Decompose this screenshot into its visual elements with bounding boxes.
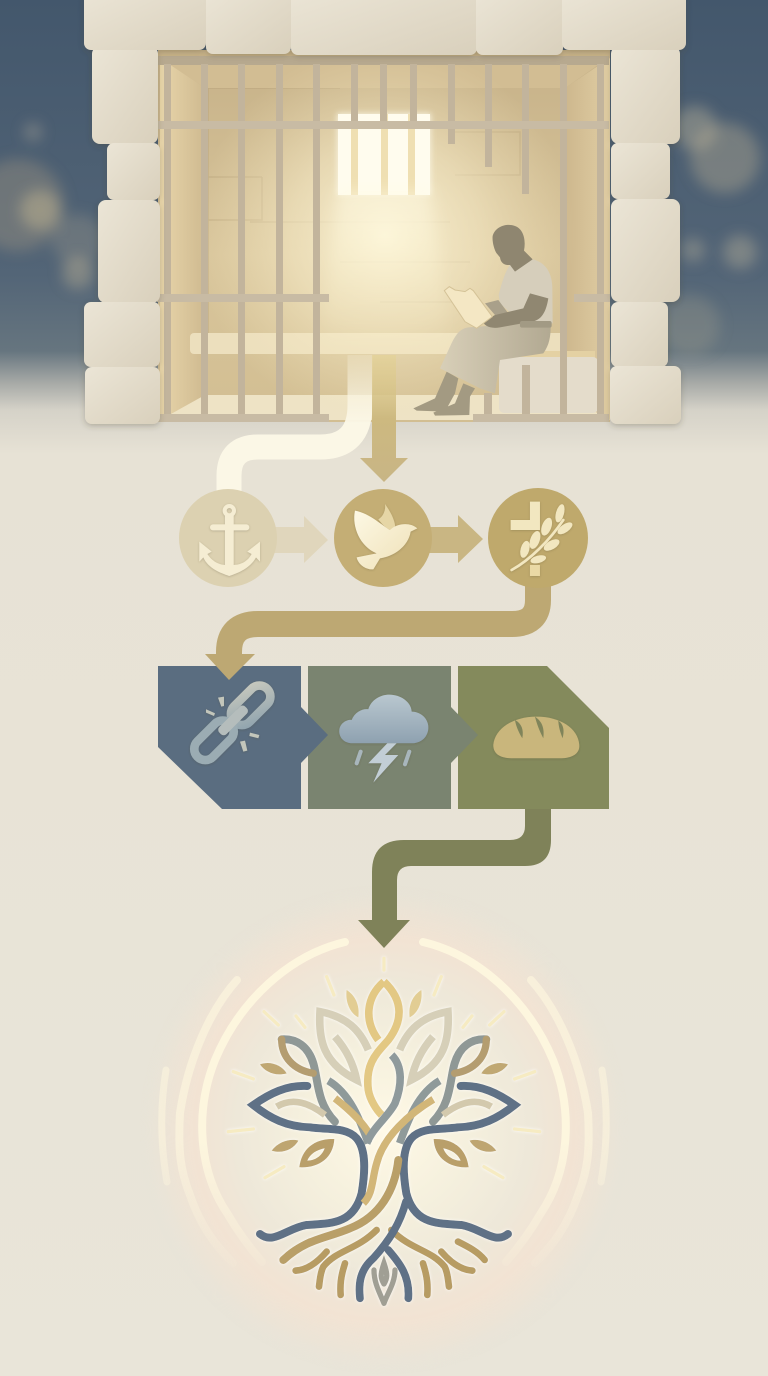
cream path to anchor xyxy=(229,355,360,500)
icon: dove xyxy=(354,504,417,569)
window xyxy=(337,113,431,195)
central top ray xyxy=(379,958,389,970)
circle: cross and olive branch xyxy=(488,488,588,588)
ceiling xyxy=(160,58,608,88)
circle: dove xyxy=(334,489,432,587)
gold arrow into dove xyxy=(360,355,408,482)
icon: bread loaf xyxy=(493,717,579,758)
circle: anchor xyxy=(179,489,277,587)
block: storm xyxy=(308,666,478,809)
central grey root xyxy=(374,1263,395,1303)
left side wall xyxy=(160,58,205,420)
arrow: anchor to dove xyxy=(270,516,328,563)
cell bars xyxy=(164,64,604,418)
wall stone courses xyxy=(208,88,565,340)
bokeh lights xyxy=(0,106,760,355)
scroll xyxy=(444,287,492,328)
seated man reading xyxy=(413,225,553,416)
light beam xyxy=(320,190,450,350)
right tree half xyxy=(391,977,540,1295)
bench xyxy=(190,333,565,354)
far arm xyxy=(485,300,508,315)
right side wall xyxy=(565,58,610,420)
arrow: dove to cross xyxy=(425,515,483,563)
gold path to chain block xyxy=(229,580,538,660)
cell floor xyxy=(160,395,610,420)
icon: anchor xyxy=(199,506,260,576)
concentric light rings xyxy=(162,942,606,1263)
icon: storm cloud xyxy=(339,695,428,783)
shin and feet xyxy=(413,372,475,416)
tree of life emblem xyxy=(228,958,540,1303)
stone frame xyxy=(84,0,686,424)
tree halo xyxy=(139,885,629,1375)
gold streams xyxy=(335,1098,433,1203)
cross bars xyxy=(157,121,610,422)
robe xyxy=(440,323,551,393)
icon: cross with branch xyxy=(511,502,574,576)
arrow head from path xyxy=(205,654,255,680)
arm xyxy=(483,293,548,328)
top frame bar xyxy=(157,56,609,65)
icon: broken chain xyxy=(190,681,275,765)
light glow xyxy=(160,58,610,420)
block: chain xyxy=(158,654,328,809)
central blue trunk xyxy=(359,1202,408,1298)
olive path to tree xyxy=(358,809,551,948)
grey braid xyxy=(367,1055,400,1143)
seat block xyxy=(499,351,598,413)
belt xyxy=(520,321,552,328)
central gold leaf xyxy=(368,982,399,1115)
left tree half xyxy=(228,977,377,1295)
prison cell xyxy=(157,50,610,422)
head and neck xyxy=(493,225,533,273)
block: bread xyxy=(458,666,609,809)
shirt xyxy=(499,259,553,325)
cell back wall xyxy=(158,50,610,422)
